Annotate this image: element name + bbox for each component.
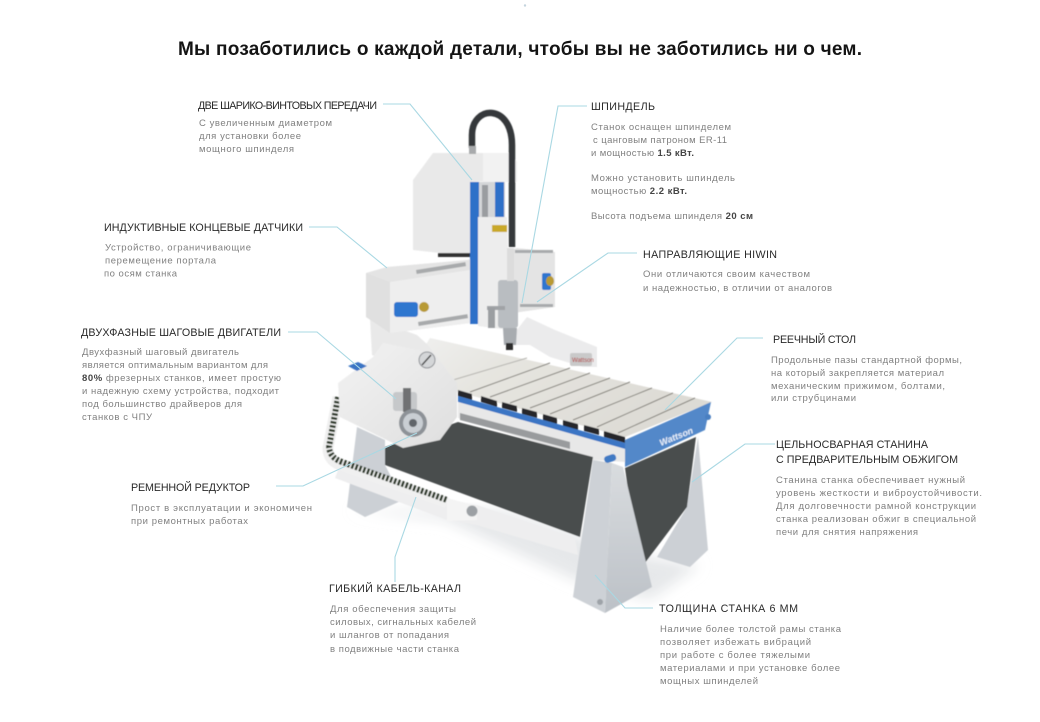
block: belt reducer: при ремонтных работах (131, 516, 248, 527)
block: welded bed: печи для снятия напряжения (776, 527, 918, 538)
block: cable carrier: в подвижные части станка (330, 644, 460, 655)
block: cable carrier: ГИБКИЙ КАБЕЛЬ-КАНАЛ (329, 582, 461, 595)
block: T-slot table: механическим прижимом, болтами, (771, 381, 945, 392)
small dot (524, 4, 526, 7)
block: spindle: ШПИНДЕЛЬ (591, 101, 655, 113)
block: frame thickness: ТОЛЩИНА СТАНКА 6 ММ (659, 603, 798, 615)
block: frame thickness: Наличие более толстой рамы станка (660, 624, 842, 635)
head block (413, 153, 517, 257)
block: belt reducer: Прост в эксплуатации и экономичен (131, 503, 312, 514)
right dark panel (625, 437, 696, 567)
block: stepper motors: ДВУХФАЗНЫЕ ШАГОВЫЕ ДВИГАТЕЛИ (81, 327, 281, 339)
block: belt reducer: РЕМЕННОЙ РЕДУКТОР (131, 481, 250, 494)
block: spindle: Станок оснащен шпинделем (591, 122, 731, 133)
block: stepper motors: и надежную схему устройства, подходит (82, 386, 280, 397)
block: welded bed: уровень жесткости и виброустойчивости. (776, 488, 982, 499)
block: welded bed: Станина станка обеспечивает нужный (776, 475, 965, 486)
left leg (347, 427, 403, 517)
leader: HIWIN rails (537, 253, 637, 302)
block: HIWIN rails: и надежностью, в отличии от аналогов (643, 283, 832, 294)
block: limit sensors: ИНДУКТИВНЫЕ КОНЦЕВЫЕ ДАТЧИКИ (104, 222, 303, 234)
block: HIWIN rails: Они отличаются своим качеством (643, 269, 810, 280)
blue flag (348, 362, 367, 371)
block: cable carrier: и шлангов от попадания (330, 630, 449, 641)
block: HIWIN rails (643, 249, 832, 294)
block: stepper motors: станков с ЧПУ (82, 412, 153, 423)
block: spindle: с цанговым патроном ER-11 (593, 135, 727, 146)
gauge (419, 352, 435, 368)
main dark panel (385, 422, 593, 537)
block: welded bed: С ПРЕДВАРИТЕЛЬНЫМ ОБЖИГОМ (776, 454, 958, 466)
linear rail (458, 402, 625, 462)
block: stepper motors: под большинство драйверов для (82, 399, 242, 410)
block: frame thickness: материалами и при установке более (660, 663, 840, 674)
cable hose (472, 113, 512, 247)
block: cable carrier: Для обеспечения защиты (330, 604, 456, 615)
block: limit sensors (104, 222, 303, 280)
block: T-slot table: РЕЕЧНЫЙ СТОЛ (773, 333, 856, 346)
block: frame thickness: при работе с более тяжелыми (660, 650, 810, 661)
leader: belt reducer (276, 433, 417, 486)
block: welded bed (776, 439, 982, 538)
block: ball screws: мощного шпинделя (199, 144, 294, 155)
block: ball screws: С увеличенным диаметром (199, 118, 332, 129)
leader: cable carrier (395, 497, 416, 582)
block: ball screws: для установки более (199, 131, 301, 142)
hose fitting (469, 146, 476, 154)
leader: frame thickness (595, 575, 653, 608)
block: stepper motors: является оптимальным вариантом для (82, 360, 268, 371)
blue table frame (458, 396, 711, 467)
block: T-slot table: на который закрепляется материал (771, 368, 944, 379)
machine badge: Wattson (572, 358, 594, 364)
block: spindle: и мощностью 1.5 кВт. (591, 148, 694, 159)
leader: welded bed (692, 444, 775, 482)
stepper motor (393, 388, 417, 412)
block: ball screws (198, 100, 377, 155)
block: stepper motors (81, 327, 281, 423)
left housing (338, 343, 457, 448)
leader lines (276, 104, 775, 608)
block: spindle: мощностью 2.2 кВт. (591, 186, 687, 197)
leader: spindle (522, 106, 587, 303)
block: T-slot table: Продольные пазы стандартной формы, (771, 355, 962, 366)
right leg (657, 437, 708, 567)
block: frame thickness (659, 603, 842, 687)
blue Z column (470, 182, 505, 324)
leader: ball screws (383, 104, 472, 180)
block: cable carrier: силовых, сигнальных кабелей (330, 617, 476, 628)
CNC machine illustration (328, 113, 712, 613)
title: Мы позаботились о каждой детали, чтобы вы не заботились ни о чем. (178, 39, 862, 60)
cable carrier (328, 397, 447, 503)
block: belt reducer (131, 481, 312, 527)
spindle (487, 248, 518, 350)
block: HIWIN rails: НАПРАВЛЯЮЩИЕ HIWIN (643, 249, 777, 261)
cable carrier bracket (447, 498, 478, 521)
blue end cap (603, 453, 617, 464)
block: T-slot table (771, 333, 962, 404)
right gantry upright (505, 317, 597, 367)
blue table frame: Wattson (658, 425, 695, 448)
block: limit sensors: Устройство, ограничивающие (105, 242, 251, 254)
Z slide plate (478, 217, 510, 330)
block: cable carrier (329, 582, 476, 655)
block: frame thickness: мощных шпинделей (660, 676, 758, 687)
block: limit sensors: перемещение портала (105, 256, 217, 266)
block: welded bed: Для долговечности рамной конструкции (776, 501, 976, 512)
gantry beam (366, 248, 555, 333)
block: stepper motors: Двухфазный шаговый двигатель (82, 347, 239, 358)
leader: limit sensors (309, 227, 387, 268)
floor shadow (350, 510, 700, 600)
left upright neck (370, 318, 457, 385)
machine badge (570, 353, 594, 366)
block: spindle (591, 101, 753, 222)
block: T-slot table: или струбцинами (771, 393, 856, 404)
block: stepper motors: 80% фрезерных станков, имеет простую (82, 373, 281, 384)
block: spindle: Можно установить шпиндель (591, 173, 735, 184)
right blue motor (542, 273, 554, 290)
block: spindle: Высота подъема шпинделя 20 см (591, 211, 753, 222)
front leg (573, 460, 652, 613)
block: frame thickness: позволяет избежать вибраций (660, 637, 811, 648)
left blue motor (394, 302, 429, 317)
block: welded bed: ЦЕЛЬНОСВАРНАЯ СТАНИНА (776, 439, 929, 451)
block: limit sensors: по осям станка (104, 268, 178, 280)
leader: T-slot table (665, 338, 763, 410)
block: welded bed: станка реализован обжиг в специальной (776, 514, 976, 525)
cross member with shaft (335, 465, 578, 555)
T-slot table (410, 338, 712, 443)
block: ball screws: ДВЕ ШАРИКО-ВИНТОВЫХ ПЕРЕДАЧИ (198, 100, 377, 112)
belt reducer wheel (399, 409, 427, 437)
leader: stepper motors (288, 332, 396, 399)
